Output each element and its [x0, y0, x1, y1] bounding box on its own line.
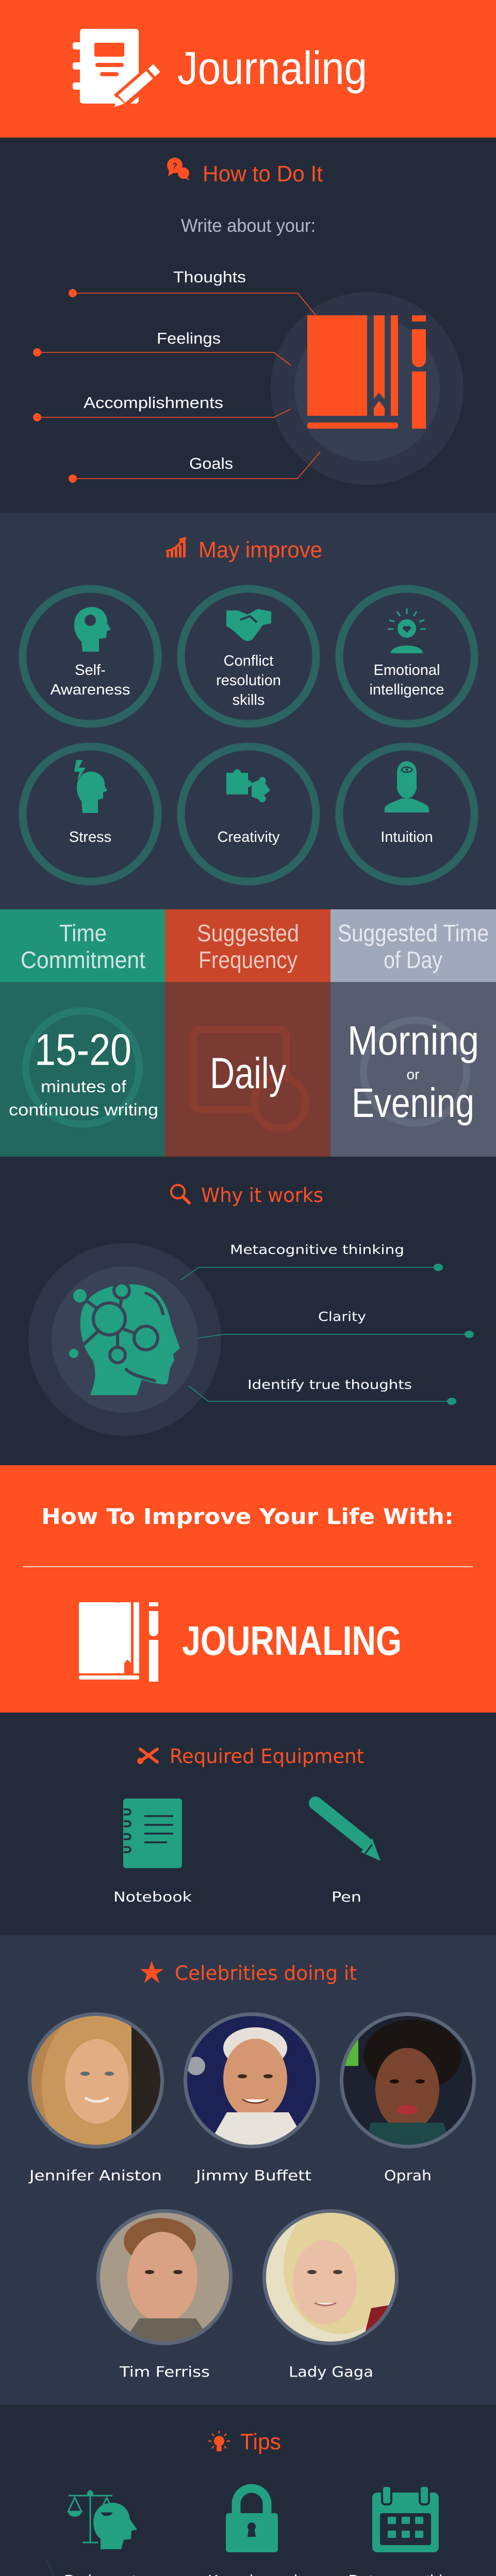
heading: celebrities: Celebrities doing it — [175, 1962, 357, 1985]
panel: why it works — [28, 1184, 474, 1436]
item: conflict resolution skills — [181, 589, 316, 724]
item: emotional intelligence — [339, 589, 474, 724]
celebrity: oprah — [338, 2009, 482, 2184]
celebrity: tim ferriss: Tim Ferriss — [119, 2363, 210, 2380]
item: pen — [316, 1803, 381, 1905]
item: conflict resolution skills: resolution — [216, 672, 281, 689]
panel: suggested frequency: Suggested — [197, 920, 299, 946]
item: pen: Pen — [332, 1889, 361, 1905]
tip: keep journal secure — [208, 2488, 297, 2576]
book illustration circle — [271, 292, 464, 485]
banner: how to improve your life with journaling: How To Improve Your Life With: — [41, 1504, 454, 1529]
item: emotional intelligence: intelligence — [369, 682, 444, 698]
list: feelings: Feelings — [157, 329, 221, 347]
tip: date everything — [348, 2486, 460, 2576]
heading: required equipment: Required Equipment — [170, 1745, 364, 1768]
panel: suggested time of day: of Day — [384, 946, 442, 973]
heading: tips — [208, 2429, 281, 2454]
celebrity: jimmy buffett: Jimmy Buffett — [195, 2167, 311, 2184]
panel: celebrities doing it — [26, 1961, 482, 2380]
banner: how to improve your life with journaling: JOURNALING — [182, 1618, 402, 1664]
heading: how to do it: How to Do It — [203, 161, 323, 187]
panel: tips — [0, 2429, 496, 2576]
celebrity: jimmy buffett — [180, 2009, 325, 2184]
heading: may improve: May improve — [199, 537, 322, 563]
list: thoughts — [69, 268, 320, 320]
item: self-awareness: Self- — [75, 662, 106, 679]
item: creativity — [181, 747, 316, 882]
celebrity: lady gaga: Lady Gaga — [289, 2363, 373, 2380]
heading: how to do it: ? — [172, 162, 177, 171]
item: metacognitive thinking — [180, 1242, 443, 1280]
item: intuition: Intuition — [381, 829, 433, 845]
item: emotional intelligence: Emotional — [374, 662, 440, 679]
panel: suggested time of day: Morning — [348, 1018, 479, 1063]
panel: time commitment: 15-20 — [35, 1025, 131, 1075]
item: clarity — [199, 1309, 474, 1338]
illustration: head with network — [28, 1243, 221, 1436]
item: conflict resolution skills: Conflict — [224, 653, 273, 669]
item: self-awareness — [23, 589, 158, 724]
item: identify true thoughts — [189, 1377, 456, 1405]
celebrity: lady gaga — [262, 2209, 399, 2380]
item: stress — [23, 747, 158, 882]
panel: time commitment: minutes of — [41, 1077, 126, 1096]
heading: how to do it — [167, 158, 323, 187]
list: accomplishments — [33, 394, 291, 421]
list: feelings — [33, 329, 291, 365]
panel: time commitment — [0, 909, 165, 1157]
icon: book and pen — [79, 1602, 158, 1682]
list: accomplishments: Accomplishments — [84, 394, 223, 412]
panel: time commitment: Commitment — [21, 946, 145, 973]
item: conflict resolution skills: skills — [233, 692, 264, 708]
panel: how to do it — [33, 158, 464, 485]
panel: suggested frequency — [165, 909, 330, 1157]
icon: notebook with pencil — [73, 29, 157, 107]
list: thoughts: Thoughts — [173, 268, 246, 286]
item: identify true thoughts: Identify true thoughts — [247, 1377, 412, 1392]
list: goals — [69, 452, 320, 483]
item: notebook: Notebook — [113, 1889, 192, 1905]
panel: time commitment: Time — [59, 920, 107, 946]
item: intuition — [339, 747, 474, 882]
header: title banner — [73, 29, 367, 107]
celebrity: jennifer aniston — [26, 2009, 173, 2184]
heading: tips: Tips — [240, 2429, 281, 2454]
item: clarity: Clarity — [318, 1309, 366, 1324]
panel: suggested frequency: Daily — [210, 1049, 286, 1097]
panel: time commitment: continuous writing — [9, 1100, 158, 1119]
panel: suggested time of day — [330, 909, 496, 1157]
panel: suggested frequency: Frequency — [199, 946, 297, 973]
item: creativity: Creativity — [218, 829, 280, 845]
title text: Journaling — [177, 43, 367, 94]
item: notebook — [113, 1799, 192, 1905]
panel: required equipment — [113, 1745, 381, 1905]
subheading: Write about your: — [181, 215, 316, 236]
celebrity: jennifer aniston: Jennifer Aniston — [28, 2167, 162, 2184]
heading: why it works: Why it works — [201, 1184, 323, 1207]
panel: suggested time of day: or — [407, 1066, 419, 1082]
background network pattern — [0, 2560, 496, 2576]
tip: be honest — [64, 2490, 137, 2576]
list: goals: Goals — [189, 454, 233, 472]
banner: how to improve your life with journaling — [23, 1504, 473, 1682]
panel: may improve — [23, 537, 474, 882]
item: self-awareness: Awareness — [51, 682, 130, 698]
celebrity: tim ferriss — [95, 2208, 240, 2380]
celebrity: oprah: Oprah — [384, 2167, 432, 2184]
item: metacognitive thinking: Metacognitive thinking — [230, 1242, 404, 1257]
item: stress: Stress — [69, 829, 111, 845]
